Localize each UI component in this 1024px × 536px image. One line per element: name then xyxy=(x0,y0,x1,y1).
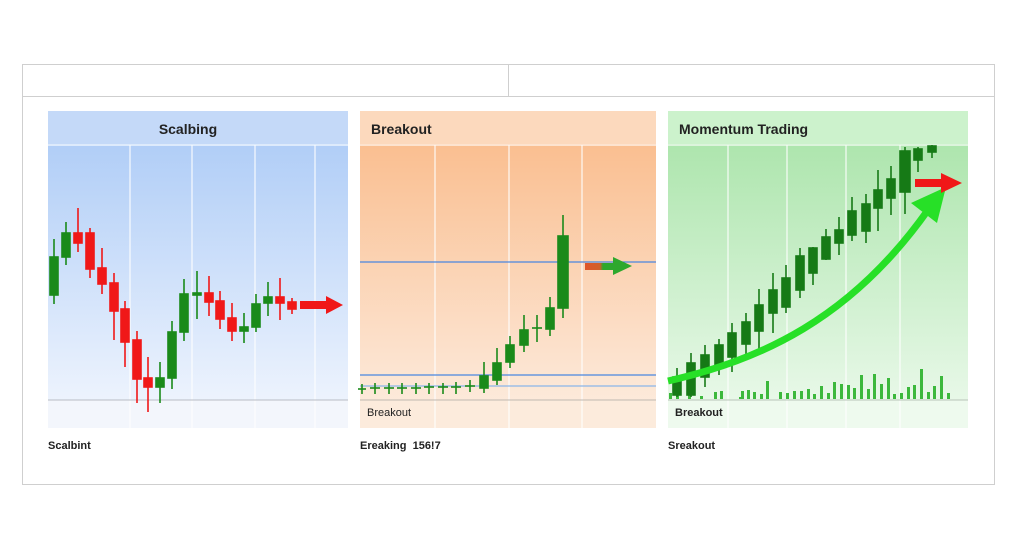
caption: Sreakout: Sreakout xyxy=(668,440,715,452)
volume bars xyxy=(669,369,950,399)
heading: Scalbing: Scalbing xyxy=(159,121,217,137)
candlestick chart: breakout xyxy=(358,215,568,394)
candlestick chart: momentum xyxy=(673,145,936,397)
arrow: breakout gradient xyxy=(585,257,632,275)
heading: Momentum Trading: Momentum Trading xyxy=(679,121,808,137)
heading: Breakout xyxy=(360,111,656,144)
arrow: red right xyxy=(915,173,962,193)
caption: Scalbint: Scalbint xyxy=(48,440,91,452)
panel: scalping xyxy=(48,111,348,428)
arrow: red right xyxy=(300,296,343,314)
panel: momentum xyxy=(668,111,968,428)
outer frame xyxy=(22,64,995,484)
arrow: green curved xyxy=(668,187,946,381)
caption: Ereaking 156!7: Ereaking 156!7 xyxy=(360,440,441,452)
label: Breakout (inner): Breakout xyxy=(675,407,723,419)
label: Breakout (inner): Breakout xyxy=(367,407,411,419)
heading: Momentum Trading xyxy=(668,111,968,144)
heading: Breakout: Breakout xyxy=(371,121,432,137)
panel: breakout xyxy=(358,111,656,428)
heading: Scalbing xyxy=(48,111,348,144)
candlestick chart: scalping xyxy=(50,208,296,412)
